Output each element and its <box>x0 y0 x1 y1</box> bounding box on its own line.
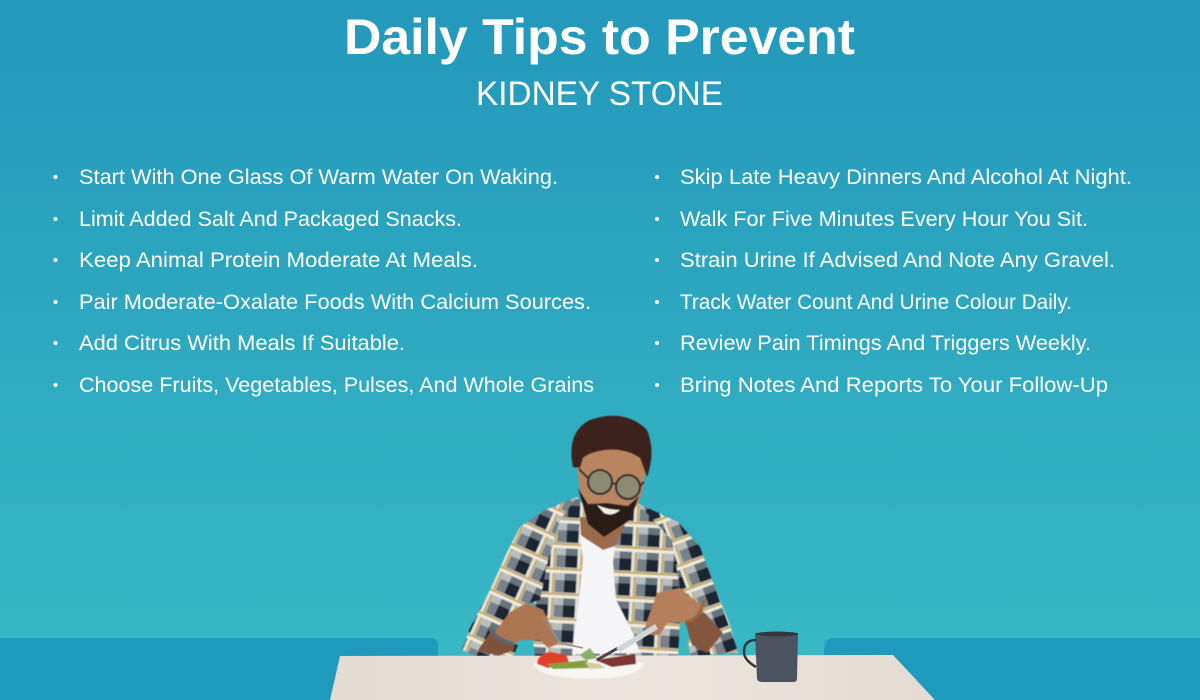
bottom band left <box>0 638 439 700</box>
left tips list: Add Citrus With Meals If Suitable. <box>79 332 405 355</box>
left tips list: Pair Moderate-Oxalate Foods With Calcium Sources. <box>79 291 591 314</box>
neck <box>580 517 627 550</box>
right sleeve <box>637 503 738 656</box>
left sleeve <box>462 497 577 657</box>
bottom band right <box>824 638 1200 700</box>
right tips list: Skip Late Heavy Dinners And Alcohol At Night. <box>680 166 1132 189</box>
title: Daily Tips to Prevent <box>344 9 855 65</box>
face <box>577 442 645 530</box>
illustration: man eating at table <box>462 416 738 657</box>
mug <box>744 632 798 682</box>
mouth <box>597 505 620 514</box>
right hand <box>645 588 703 635</box>
bracelet <box>685 600 704 622</box>
subtitle: KIDNEY STONE <box>476 75 723 113</box>
t-shirt <box>572 535 640 654</box>
left tips list: Limit Added Salt And Packaged Snacks. <box>79 208 462 231</box>
hair <box>571 416 652 477</box>
band centre background <box>438 630 824 660</box>
left tips list: Keep Animal Protein Moderate At Meals. <box>79 249 478 272</box>
right tips list: Review Pain Timings And Triggers Weekly. <box>680 332 1091 355</box>
table <box>330 655 935 700</box>
wristband <box>490 627 514 644</box>
left hand <box>495 603 558 648</box>
knife <box>597 624 658 660</box>
beard <box>578 488 639 537</box>
left tips list <box>54 166 594 397</box>
right forearm <box>685 612 723 653</box>
right tips list: Strain Urine If Advised And Note Any Gravel. <box>680 249 1115 272</box>
left forearm <box>478 630 515 656</box>
fork <box>543 617 583 648</box>
right tips list: Walk For Five Minutes Every Hour You Sit. <box>680 208 1088 231</box>
left tips list: Choose Fruits, Vegetables, Pulses, And Whole Grains <box>79 374 594 397</box>
plate of food <box>533 648 644 679</box>
right tips list: Track Water Count And Urine Colour Daily. <box>680 291 1072 314</box>
glasses <box>579 469 644 499</box>
left tips list: Start With One Glass Of Warm Water On Waking. <box>79 166 558 189</box>
right tips list: Bring Notes And Reports To Your Follow-Up <box>680 374 1108 397</box>
right tips list <box>655 166 1132 397</box>
torso of shirt <box>533 497 690 656</box>
